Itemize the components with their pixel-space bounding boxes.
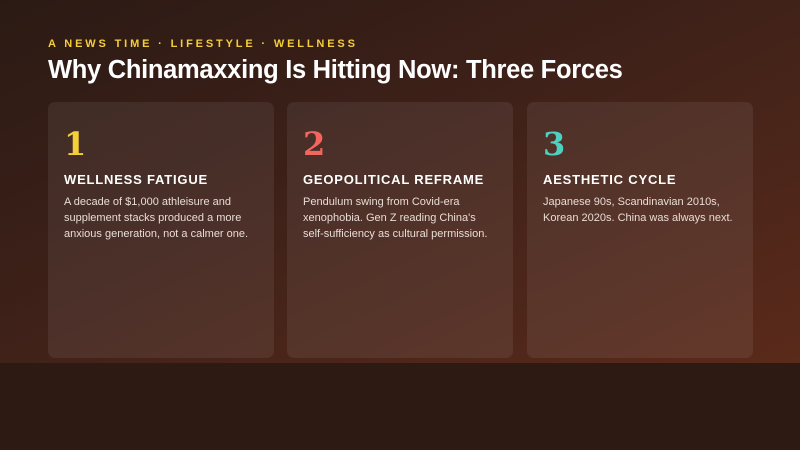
panel: wellness fatigue <box>48 102 274 358</box>
number 1: 1 <box>64 125 86 163</box>
panel: geopolitical reframe <box>287 102 513 358</box>
heading: GEOPOLITICAL REFRAME <box>303 172 484 187</box>
body text: Japanese 90s, Scandinavian 2010s, Korean 2020s. China was always next. <box>543 196 733 224</box>
body text: A decade of $1,000 athleisure and supplement stacks produced a more anxious generation, not a calmer one. <box>64 196 248 240</box>
heading: WELLNESS FATIGUE <box>64 172 208 187</box>
title: Why Chinamaxxing Is Hitting Now: Three Forces <box>48 56 622 84</box>
number 3: 3 <box>543 125 565 163</box>
heading: AESTHETIC CYCLE <box>543 172 676 187</box>
body text: Pendulum swing from Covid-era xenophobia. Gen Z reading China's self-sufficiency as cultural permission. <box>303 196 487 240</box>
number 2: 2 <box>303 125 325 163</box>
kicker: A NEWS TIME · LIFESTYLE · WELLNESS <box>48 38 358 50</box>
panel: aesthetic cycle <box>527 102 753 358</box>
